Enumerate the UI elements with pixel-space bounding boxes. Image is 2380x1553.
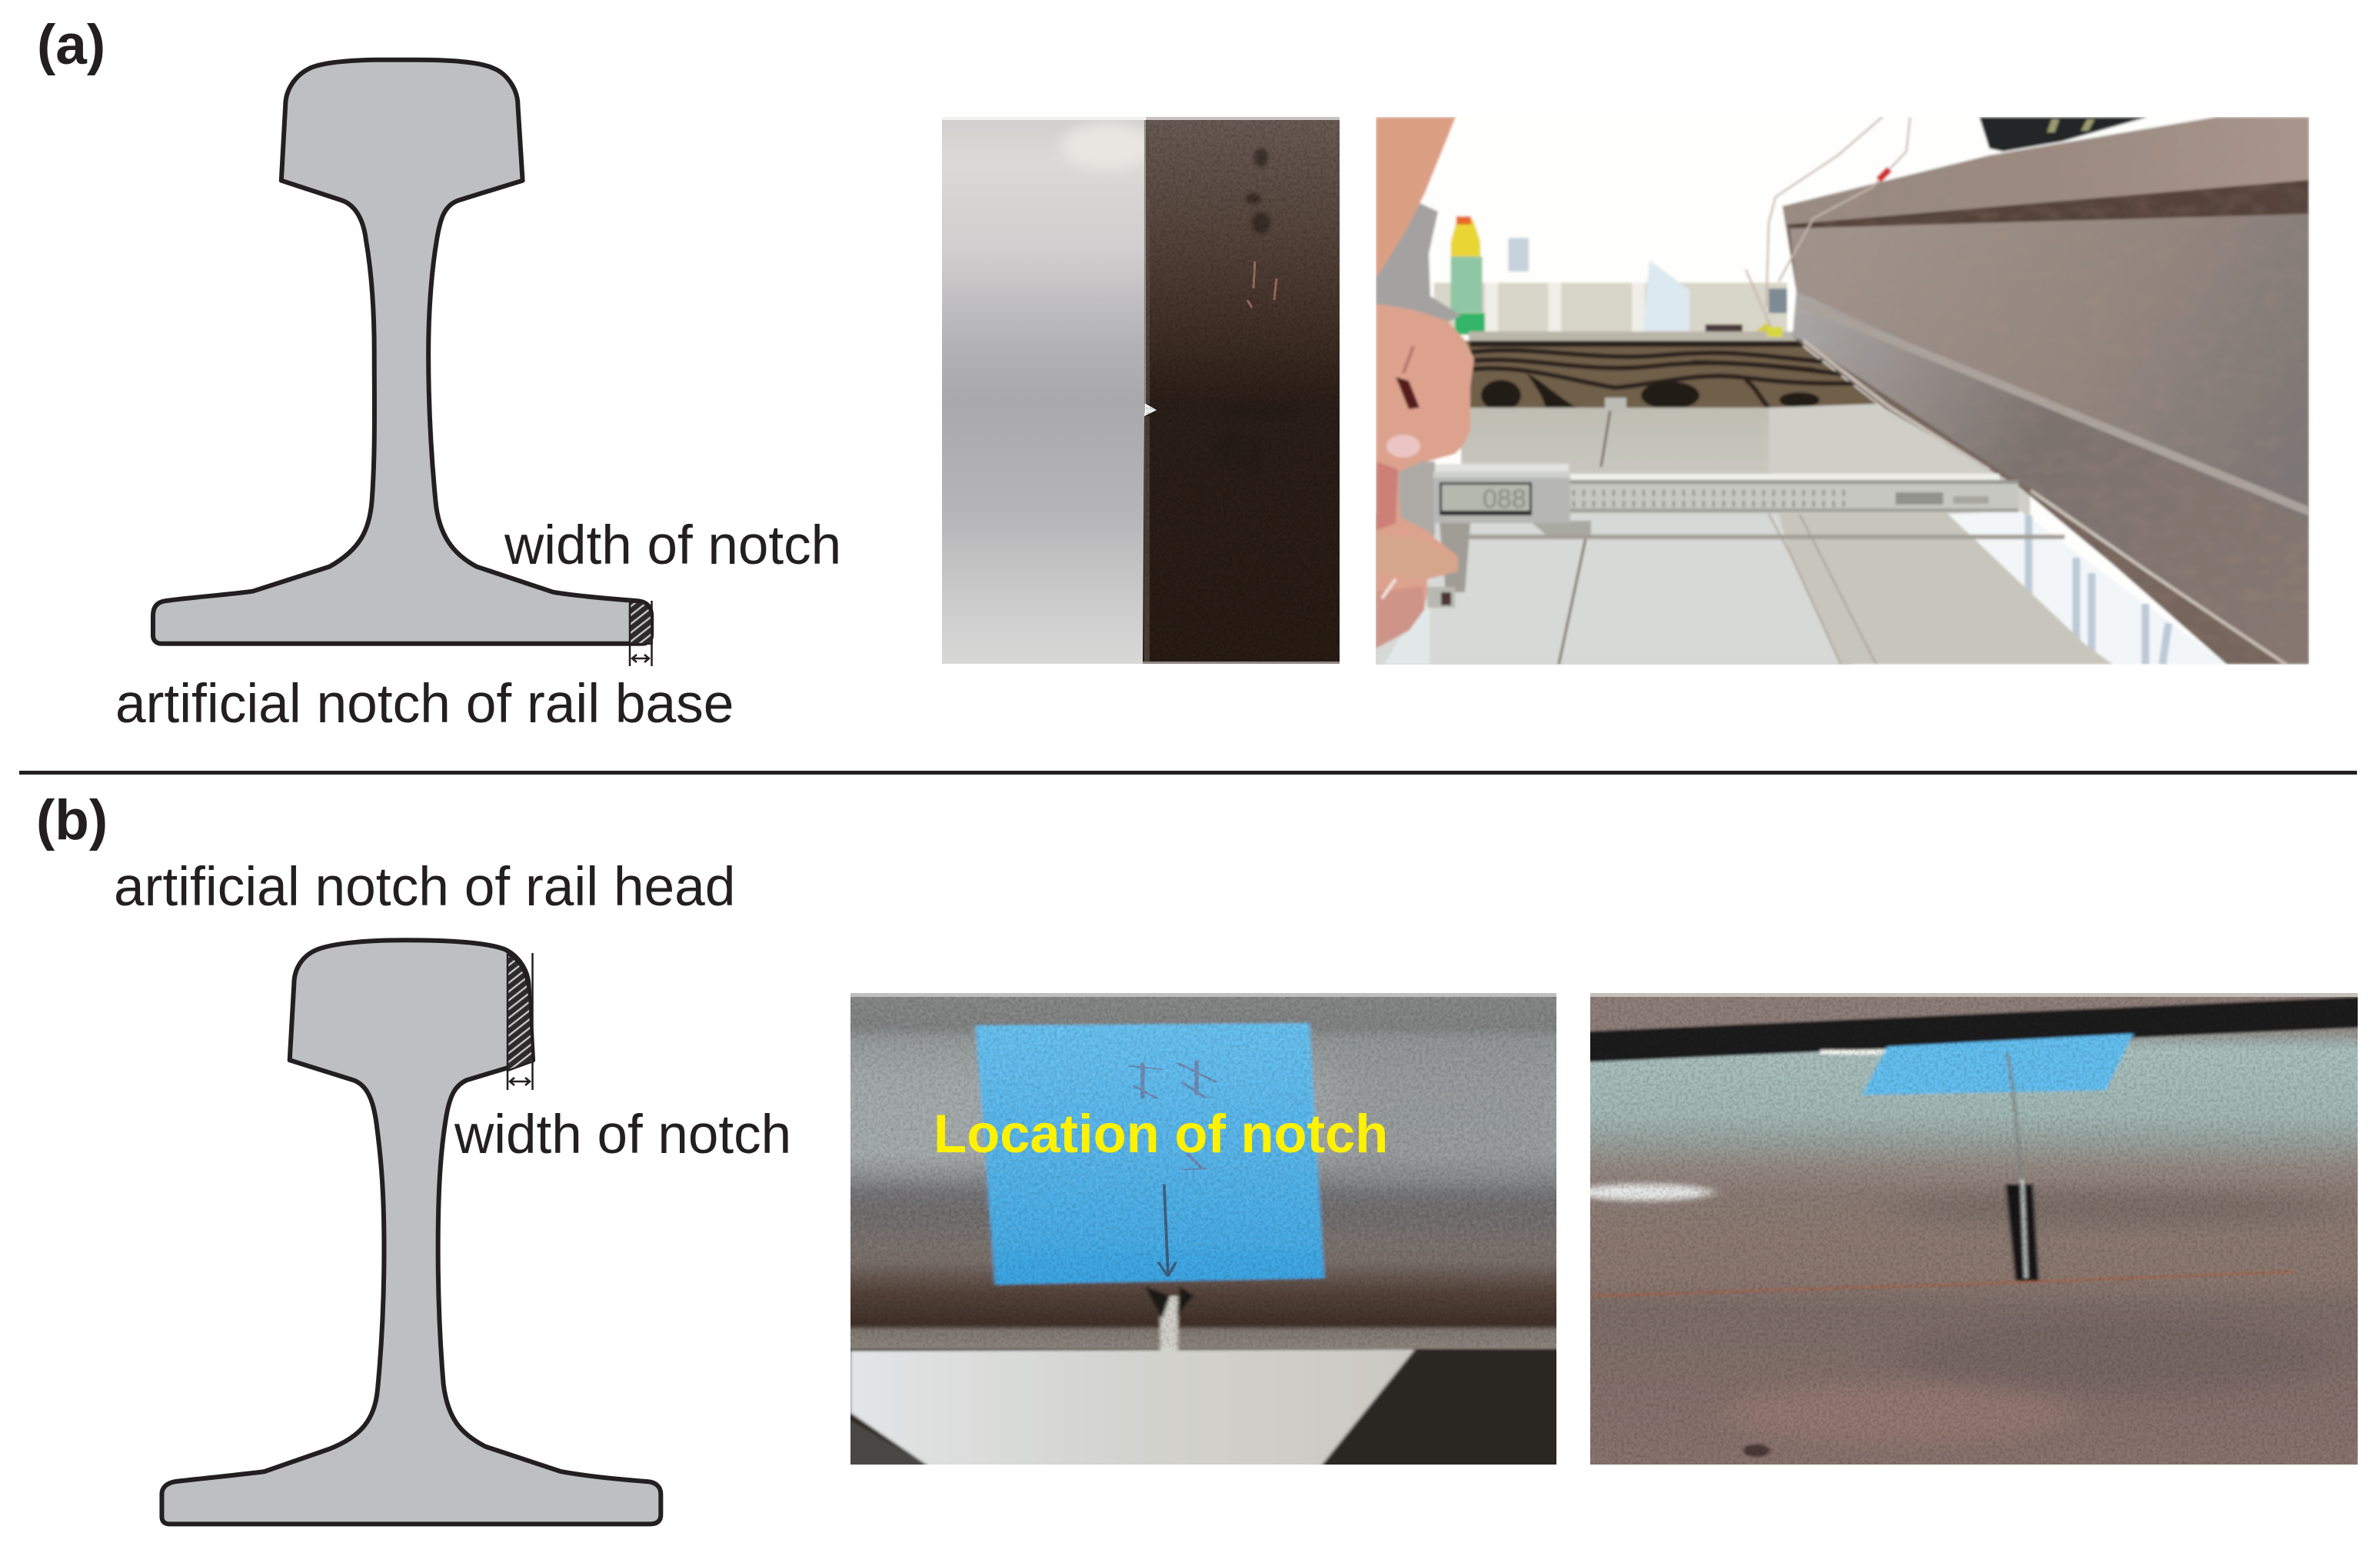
- rail outline: [161, 940, 661, 1524]
- background shelf, bottle and bag: [1434, 216, 1787, 335]
- panel label (b): (b): [36, 789, 108, 851]
- wood block: [1465, 341, 1884, 409]
- hand: [1376, 304, 1474, 648]
- photo: location of notch on rail head: [837, 988, 1566, 1471]
- caption: location of notch: Location of notch: [934, 1103, 1388, 1164]
- label: artificial notch of rail head: artificial notch of rail head: [114, 856, 735, 918]
- label: width of notch (b): width of notch: [454, 1105, 791, 1165]
- window: [1948, 511, 2227, 665]
- wall at lower left: [1384, 600, 1430, 665]
- panel label (a): (a): [37, 14, 105, 76]
- notch width dimension: [508, 953, 532, 1090]
- photo: caliper measuring rail base notch: [1376, 117, 2309, 665]
- rail body: [1783, 117, 2309, 665]
- photo: notch in rail base, close-up: [942, 117, 1340, 664]
- floor seams: [1559, 410, 1610, 665]
- floor beam: [1779, 514, 2113, 665]
- black object on rail: [1979, 117, 2148, 152]
- wires: [1746, 117, 1910, 331]
- translucent block: [1605, 398, 1626, 411]
- caliper scale bar: [1569, 474, 1999, 480]
- hatched notch at rail base: [630, 602, 652, 644]
- divider between panels: [19, 771, 2357, 775]
- rail outline: [153, 60, 651, 644]
- photo: notch on rail head, wider view: [1575, 988, 2372, 1471]
- rail cross-section: base notch: [153, 60, 652, 666]
- hatched notch at rail head: [508, 955, 533, 1071]
- notch width dimension: [630, 601, 652, 666]
- caliper digital readout: 088: [1483, 485, 1526, 514]
- caliper body: [1435, 464, 1569, 472]
- rail cross-section: head notch: [161, 940, 661, 1524]
- floor: [1461, 408, 1938, 531]
- grey rail in background: [1376, 201, 1461, 323]
- photo background and tape: [850, 993, 1556, 1465]
- label: width of notch (a): width of notch: [504, 515, 841, 576]
- arm: [1376, 117, 1456, 275]
- label: artificial notch of rail base: artificial notch of rail base: [115, 673, 734, 735]
